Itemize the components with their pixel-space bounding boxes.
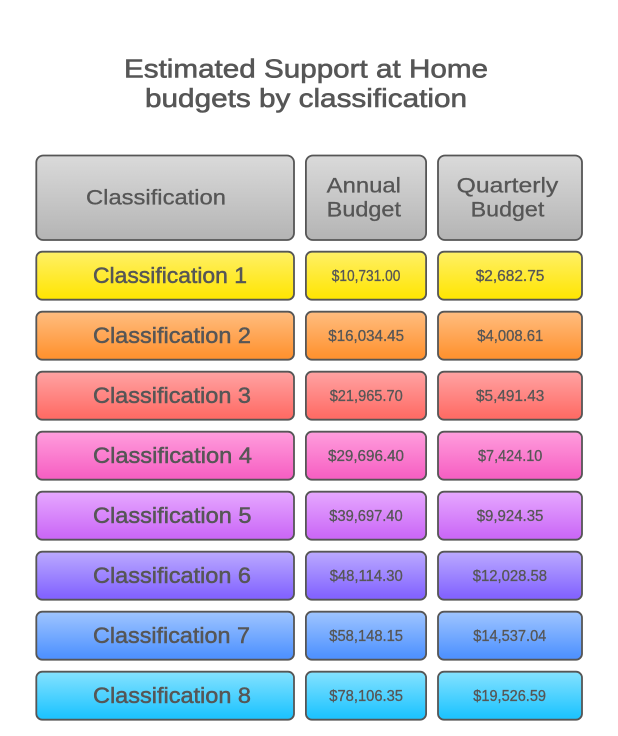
row: Classification 4: Classification 4 xyxy=(93,443,252,468)
row: Classification 5: $9,924.35 xyxy=(477,508,543,525)
row: Classification 4: $29,696.40 xyxy=(328,448,404,465)
row: Classification 8: $19,526.59 xyxy=(473,688,546,705)
row: Classification 3: $5,491.43 xyxy=(476,388,544,405)
row: Classification 4: $7,424.10 xyxy=(478,448,542,465)
row: Classification 5: Classification 5 xyxy=(93,503,252,528)
row: Classification 1 xyxy=(36,252,582,300)
row: Classification 4 xyxy=(36,432,582,480)
row: Classification 1: $10,731.00 xyxy=(332,268,400,285)
row: Classification 2: $16,034.45 xyxy=(328,328,404,345)
row: Classification 8: Classification 8 xyxy=(93,683,251,708)
row: Classification 7: $14,537.04 xyxy=(473,628,546,645)
row: Classification 6: Classification 6 xyxy=(93,563,251,588)
row: Classification 5: $39,697.40 xyxy=(329,508,403,525)
header: Classification: Classification xyxy=(86,186,226,210)
header: Annual Budget: Budget xyxy=(327,198,401,222)
header: Classification xyxy=(36,156,294,240)
header row xyxy=(36,156,582,240)
row: Classification 3 xyxy=(36,372,582,420)
row: Classification 7: Classification 7 xyxy=(93,623,250,648)
row: Classification 1: Classification 1 xyxy=(93,263,247,288)
row: Classification 8: $78,106.35 xyxy=(329,688,403,705)
row: Classification 2 xyxy=(36,312,582,360)
row: Classification 3: Classification 3 xyxy=(93,383,251,408)
row: Classification 7 xyxy=(36,612,582,660)
row: Classification 2: Classification 2 xyxy=(93,323,251,348)
header: Quarterly Budget xyxy=(438,156,582,240)
row: Classification 3: $21,965.70 xyxy=(330,388,403,405)
row: Classification 5 xyxy=(36,492,582,540)
table xyxy=(36,156,582,720)
row: Classification 8 xyxy=(36,672,582,720)
row: Classification 1: $2,682.75 xyxy=(476,268,544,285)
row: Classification 6 xyxy=(36,552,582,600)
header: Annual Budget: Annual xyxy=(327,175,401,198)
row: Classification 6: $12,028.58 xyxy=(473,568,547,585)
title: budgets by classification xyxy=(145,83,467,113)
title: Estimated Support at Home xyxy=(124,54,488,84)
row: Classification 2: $4,008.61 xyxy=(477,328,543,345)
header: Annual Budget xyxy=(306,156,426,240)
row: Classification 7: $58,148.15 xyxy=(329,628,403,645)
header: Quarterly Budget: Quarterly xyxy=(457,175,559,198)
title xyxy=(124,54,488,113)
row: Classification 6: $48,114.30 xyxy=(330,568,403,585)
header: Quarterly Budget: Budget xyxy=(471,198,544,222)
